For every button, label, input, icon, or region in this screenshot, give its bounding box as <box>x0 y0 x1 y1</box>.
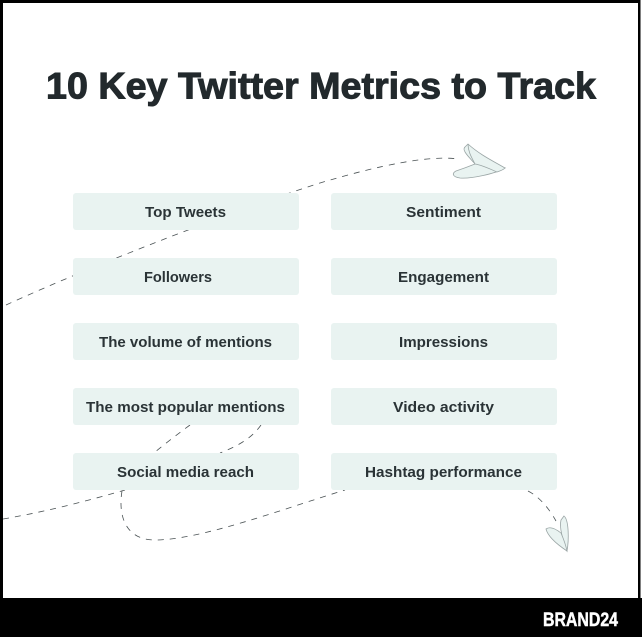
metric: Sentiment <box>331 193 557 230</box>
metric: Followers <box>73 258 299 295</box>
title: 10 Key Twitter Metrics to Track <box>46 66 596 106</box>
dashed flight path <box>3 158 556 540</box>
metric: The volume of mentions: The volume of mentions <box>99 334 272 351</box>
metric: Followers: Followers <box>144 269 212 286</box>
metric: Sentiment: Sentiment <box>406 204 481 221</box>
metric: Impressions <box>331 323 557 360</box>
brand logo: BRAND24 <box>543 609 618 631</box>
metric: Social media reach <box>73 453 299 490</box>
metric: Engagement <box>331 258 557 295</box>
metric: Video activity: Video activity <box>393 399 495 416</box>
icon: paper plane bottom <box>546 516 568 551</box>
metric: Top Tweets <box>73 193 299 230</box>
footer bar <box>0 598 642 637</box>
metric: Impressions: Impressions <box>399 334 488 351</box>
metric: Top Tweets: Top Tweets <box>145 204 226 221</box>
metric: The most popular mentions <box>73 388 299 425</box>
metric: Engagement: Engagement <box>398 269 489 286</box>
metric: Hashtag performance: Hashtag performance <box>365 464 522 481</box>
metric: The volume of mentions <box>73 323 299 360</box>
metric: The most popular mentions: The most popular mentions <box>86 399 285 416</box>
icon: paper plane top <box>453 144 505 178</box>
metric: Hashtag performance <box>331 453 557 490</box>
metric: Video activity <box>331 388 557 425</box>
metric: Social media reach: Social media reach <box>117 464 254 481</box>
